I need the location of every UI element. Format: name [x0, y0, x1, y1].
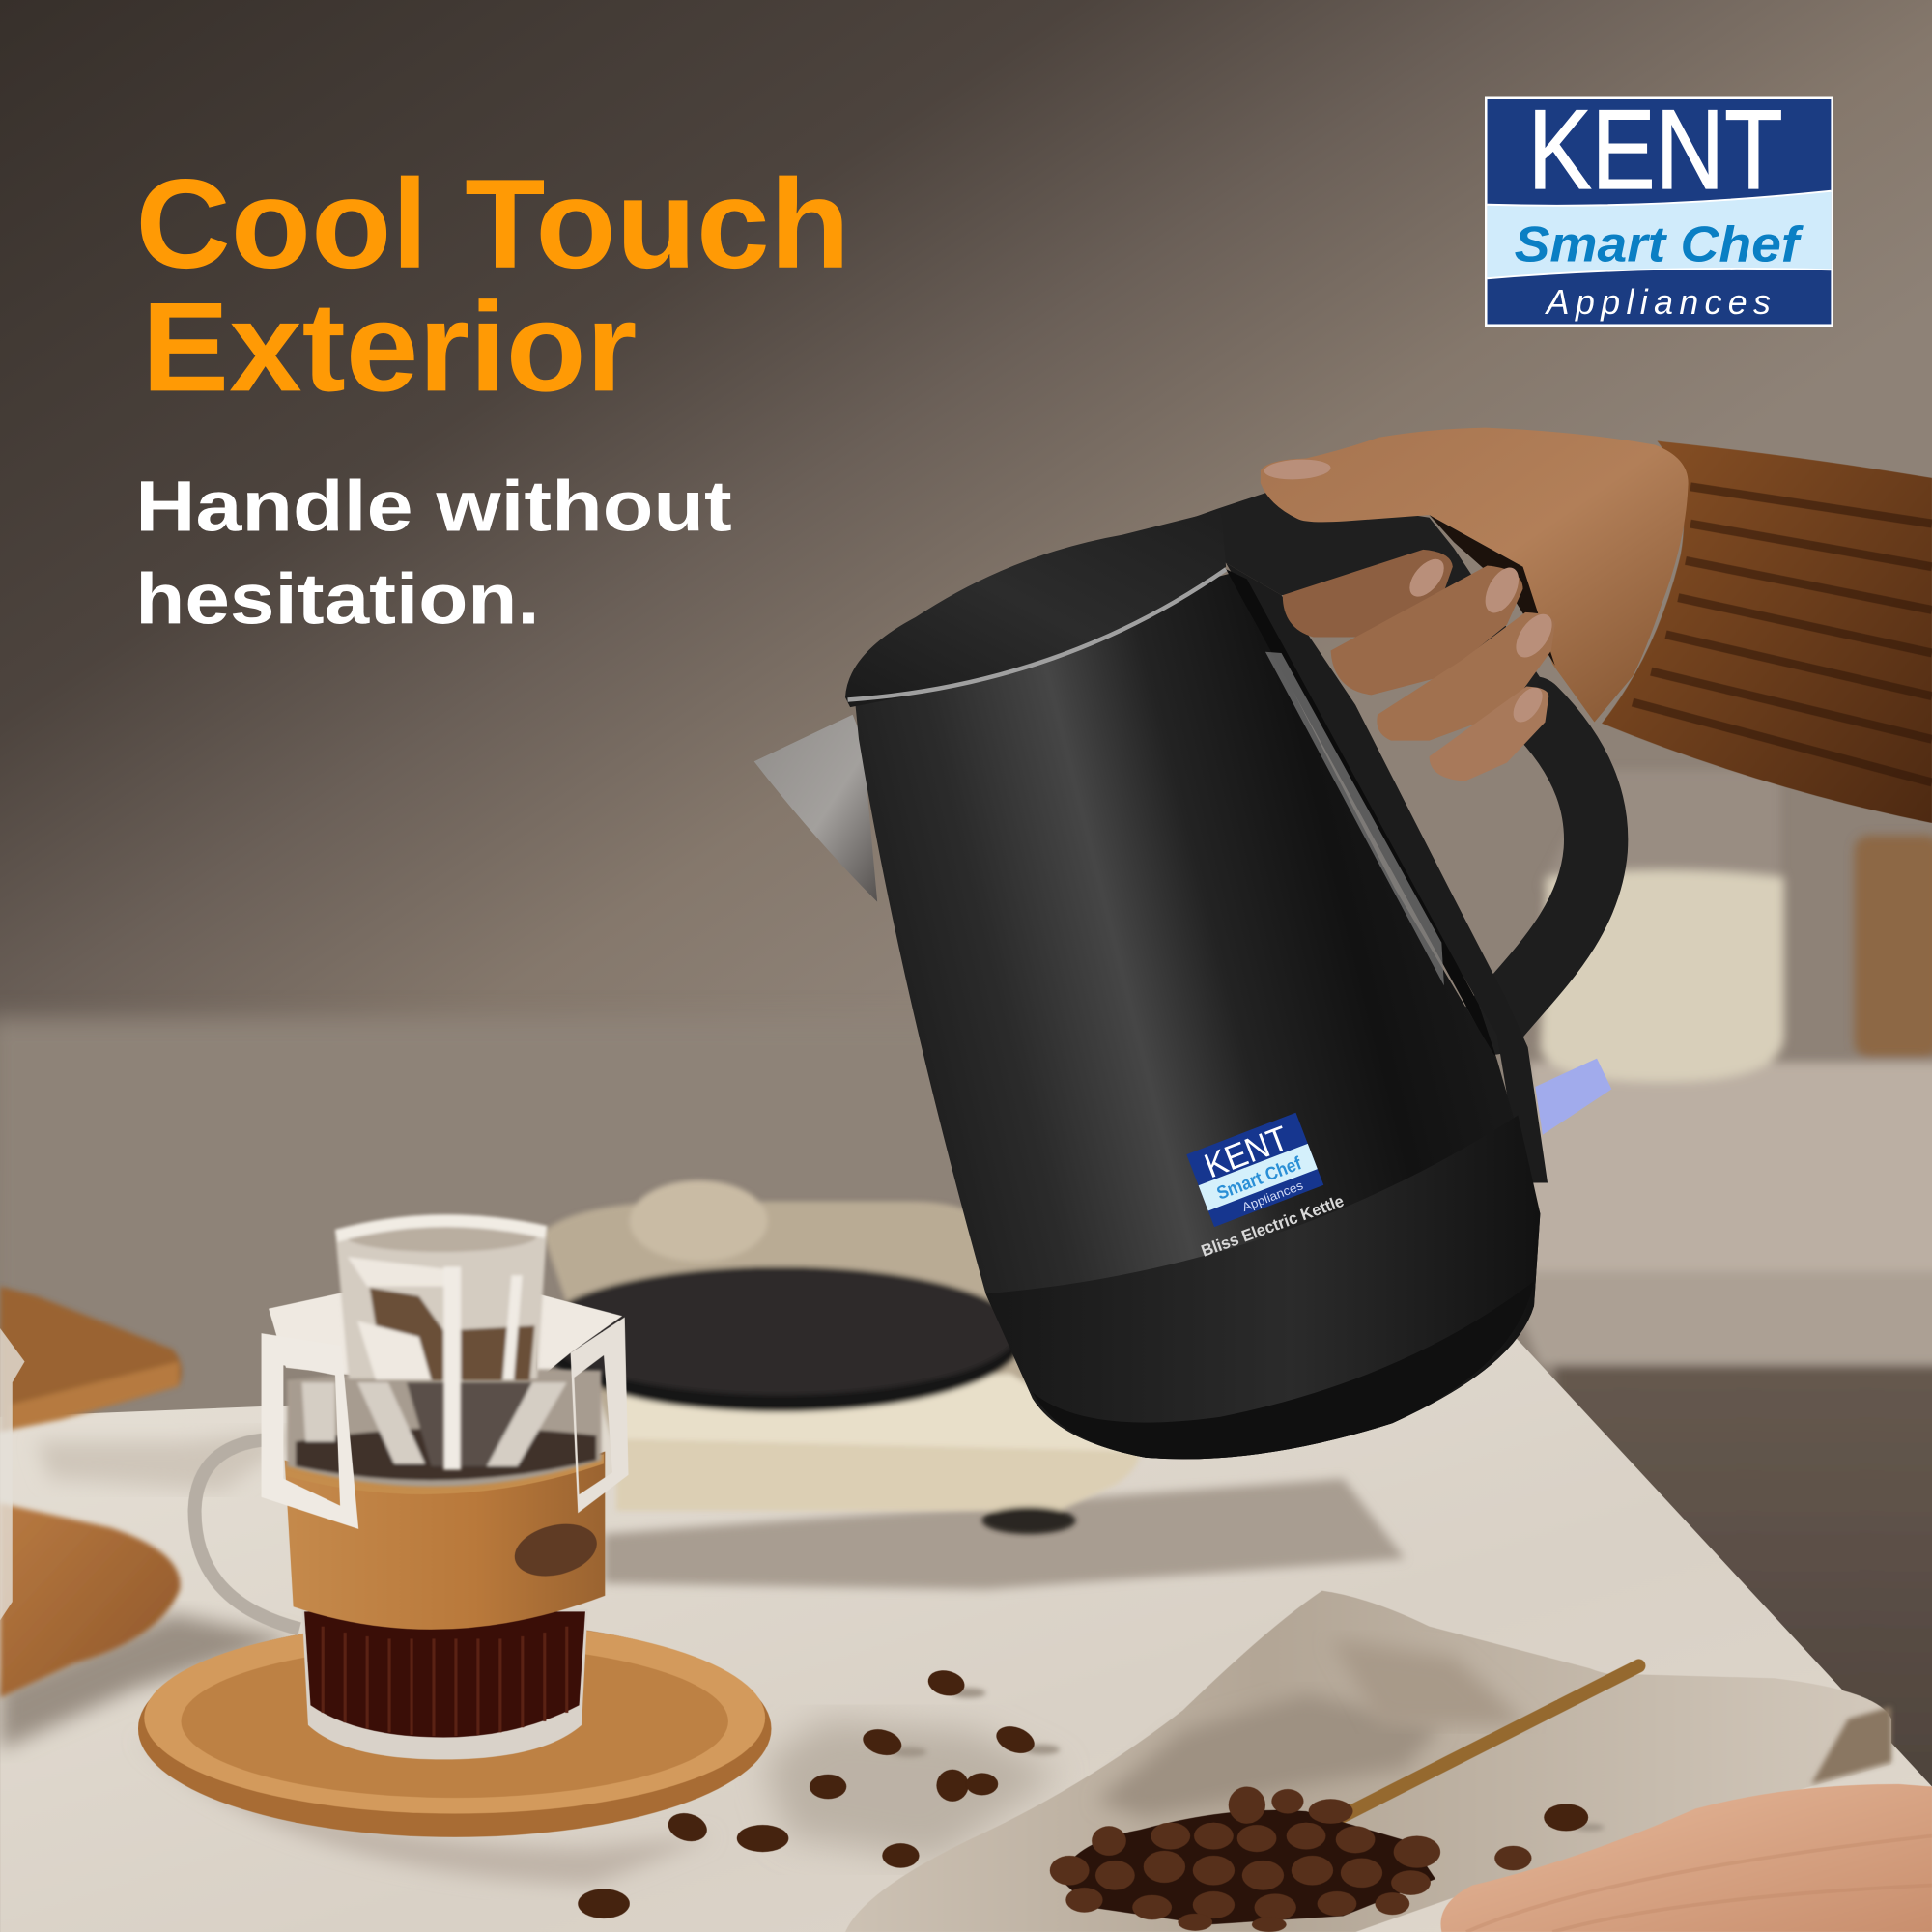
palm and thumb: [1261, 428, 1689, 722]
back paper wings: [269, 1282, 622, 1380]
kettle logo: KENT: [1199, 1119, 1293, 1185]
title: Exterior: [142, 275, 637, 417]
kettle body: [855, 573, 1540, 1459]
kettle lid: [845, 510, 1226, 707]
body edge channel: [1226, 569, 1497, 1060]
kettle handle grip: [1493, 708, 1596, 1023]
induction hob: [537, 1180, 1140, 1534]
hand holding kettle: [1261, 428, 1689, 781]
bean shadows: [892, 1688, 1605, 1831]
glass lower with coffee: [301, 1609, 587, 1759]
left wooden tray: [0, 1503, 181, 1698]
kettle logo: [1186, 1113, 1323, 1227]
stone: [630, 1180, 768, 1262]
logo Appliances: Appliances: [1545, 283, 1771, 322]
pile of coffee beans: [1050, 1786, 1531, 1932]
sweater sleeve: [1602, 441, 1932, 823]
linen cloth: [845, 1591, 1891, 1932]
kettle logo: Appliances: [1240, 1178, 1305, 1214]
subtitle: hesitation.: [135, 558, 540, 639]
logo wordmark KENT: KENT: [1528, 86, 1783, 213]
blue switch: [1535, 1059, 1611, 1135]
fingers: [1283, 550, 1555, 781]
sleeve badge: [509, 1516, 603, 1584]
left glass jar edge: [0, 1328, 25, 1620]
nails: [1264, 458, 1559, 727]
wooden sleeve: [285, 1452, 605, 1630]
handle top bar: [1158, 493, 1540, 752]
background wooden canister: [1855, 836, 1932, 1057]
kettle foot: [1033, 1282, 1534, 1459]
kettle spout: [754, 715, 877, 902]
drip bag pouch: [335, 1214, 547, 1470]
hob black plate: [537, 1266, 1023, 1412]
shadow under palm: [1430, 515, 1555, 666]
body window stripe: [1265, 652, 1444, 985]
hob foot: [982, 1507, 1076, 1534]
hob back surface: [542, 1202, 1140, 1448]
brand logo: [1485, 86, 1833, 327]
right paper tag: [571, 1318, 629, 1513]
kettle model name: Bliss Electric Kettle: [1199, 1191, 1347, 1261]
background jar: [1540, 770, 1784, 1082]
left paper tag: [261, 1333, 358, 1529]
logo Smart Chef: Smart Chef: [1515, 216, 1804, 272]
subtitle: Handle without: [135, 467, 732, 547]
cup and saucer: [138, 1214, 771, 1837]
handle side strip: [1226, 563, 1548, 1182]
upper left wooden board: [0, 1287, 182, 1432]
shadows on counter: [0, 1430, 1405, 1886]
electric kettle: [754, 493, 1611, 1459]
glass handle: [195, 1439, 299, 1629]
title: [135, 153, 850, 417]
background counter and shelf: [0, 770, 1932, 1932]
kettle base band: [985, 1115, 1540, 1459]
title: Cool Touch: [135, 153, 850, 295]
gold spoon: [1314, 1665, 1638, 1831]
hob front face: [616, 1439, 1140, 1511]
kettle logo: Smart Chef: [1214, 1153, 1305, 1205]
subtitle: [135, 467, 732, 639]
lower hand: [1440, 1784, 1932, 1932]
front counter: [0, 1324, 1932, 1932]
wooden saucer: [138, 1620, 771, 1837]
glass body with coffee: [287, 1369, 601, 1487]
hob top face: [616, 1374, 1140, 1452]
scattered coffee beans: [578, 1667, 1605, 1918]
